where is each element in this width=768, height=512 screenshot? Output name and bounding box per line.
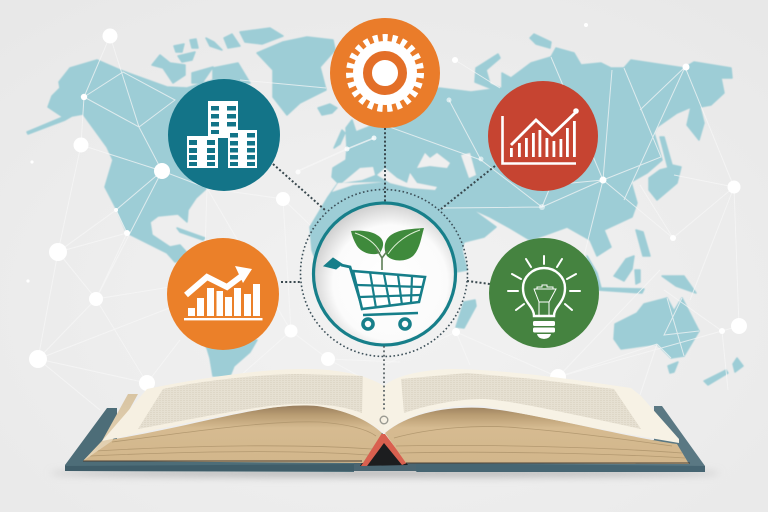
icon: cart — [324, 258, 425, 329]
left page — [102, 369, 384, 441]
Tasmania — [668, 362, 678, 373]
Caribbean — [177, 228, 205, 240]
central shopping cart badge — [314, 203, 456, 345]
Madagascar — [456, 300, 476, 328]
world map — [27, 28, 743, 385]
badge: gear — [330, 18, 440, 128]
right page block — [385, 408, 689, 464]
left page block — [83, 405, 382, 463]
book centre connector — [380, 346, 388, 424]
network node dots — [26, 23, 747, 391]
Japan — [649, 137, 681, 200]
South America — [200, 340, 257, 376]
Greenland — [257, 37, 335, 115]
Iceland — [318, 104, 337, 115]
badge: buildings — [168, 79, 280, 191]
icon: dotted ring — [300, 190, 468, 356]
badge: light bulb — [489, 238, 599, 348]
book shadow — [50, 469, 720, 477]
left page text block — [138, 374, 363, 429]
badge: bar chart with arrow — [167, 238, 279, 350]
Australia — [614, 298, 699, 358]
open book — [65, 369, 705, 472]
spine — [354, 463, 416, 471]
Canadian Arctic islands — [152, 28, 283, 83]
right page — [384, 369, 679, 443]
Baltic land — [475, 54, 505, 90]
disc — [314, 203, 456, 345]
British Isles — [334, 130, 345, 148]
Eurasia and Africa — [310, 48, 732, 300]
dotted connectors — [273, 128, 495, 284]
network of nodes — [38, 36, 739, 410]
Novaya Zemlya — [530, 34, 551, 48]
Indonesia — [587, 230, 696, 293]
right page text block — [401, 373, 641, 429]
Caspian and Mediterranean cut-outs — [332, 153, 476, 192]
New Zealand — [704, 358, 743, 385]
North America — [27, 60, 240, 262]
icon: leaves — [351, 228, 424, 270]
back cover — [65, 408, 363, 472]
badge: rising line chart — [488, 81, 598, 191]
